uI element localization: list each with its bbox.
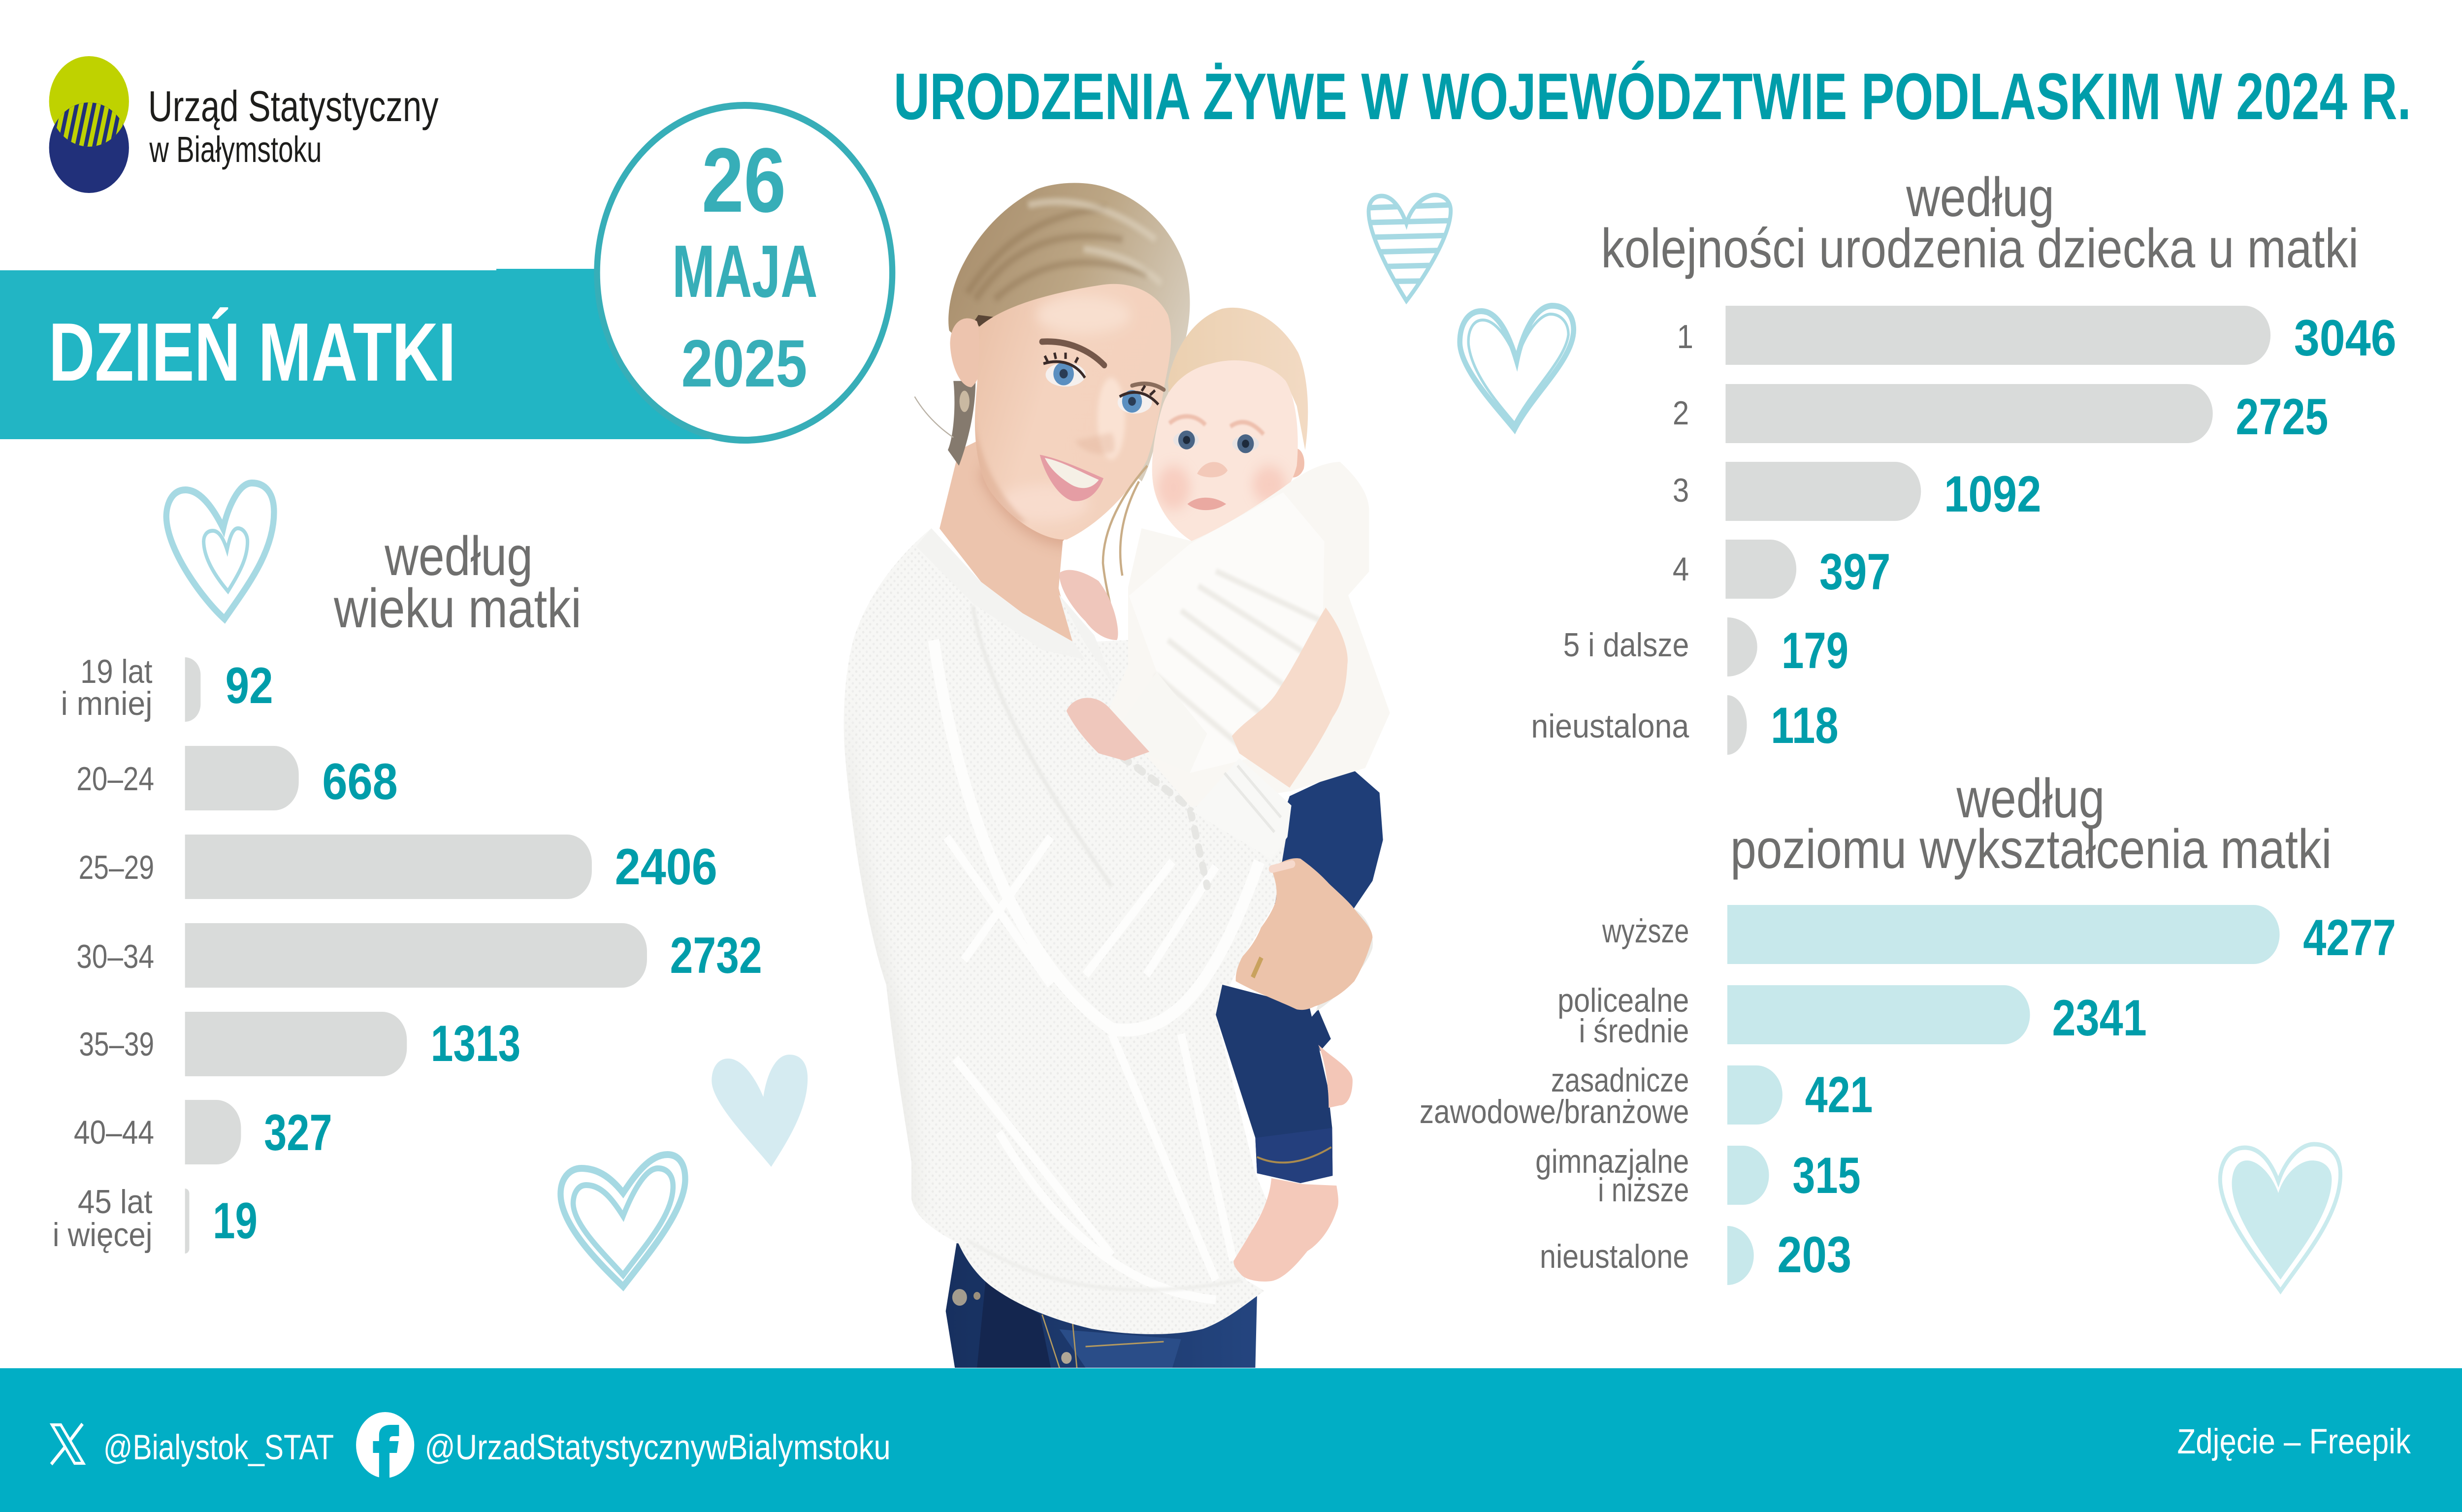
photo: mother holding baby xyxy=(825,183,1390,1368)
heading: education xyxy=(1730,768,2332,880)
lips and smile xyxy=(1040,455,1103,501)
bar chart: education xyxy=(1727,905,2280,1285)
panel: by birth order xyxy=(1531,166,2397,755)
labels: birth order xyxy=(1531,318,1693,745)
woman's jeans xyxy=(946,1243,1257,1368)
labels: education: wyższe xyxy=(1602,912,1689,950)
logo: w Białymstoku xyxy=(149,129,322,170)
ear xyxy=(950,318,984,387)
X handle: @Bialystok_STAT xyxy=(103,1428,334,1467)
labels: education: zawodowe/branżowe xyxy=(1420,1093,1689,1130)
values: birth order: 179 xyxy=(1782,622,1848,679)
woman's lower hand xyxy=(1236,858,1373,1012)
heading: education: poziomu wykształcenia matki xyxy=(1730,818,2332,880)
values: age: 2406 xyxy=(615,838,717,895)
woman's sweater cuff xyxy=(1193,758,1292,859)
values: age: 19 xyxy=(213,1192,258,1249)
eyebrows xyxy=(1042,342,1104,365)
labels: birth order: 1 xyxy=(1677,318,1693,355)
baby's sleeve xyxy=(1109,492,1325,773)
baby's head xyxy=(1103,308,1308,632)
icon: X xyxy=(51,1424,83,1464)
baby's feet xyxy=(1233,1045,1353,1282)
values: age: 668 xyxy=(322,753,398,810)
woman's neck xyxy=(939,442,1072,642)
panel: by mother's age xyxy=(53,525,762,1254)
date circle xyxy=(597,105,892,440)
labels: age: 20–24 xyxy=(76,760,154,798)
heading: birth order xyxy=(1601,166,2359,279)
values: education: 2341 xyxy=(2052,989,2147,1046)
baby's eyes xyxy=(1173,432,1199,448)
woman's upper hand xyxy=(1232,608,1348,788)
sweater collar xyxy=(916,528,1086,660)
values: age: 92 xyxy=(226,657,273,714)
values: age: 327 xyxy=(264,1104,332,1161)
bar chart: birth order xyxy=(1725,306,2270,755)
loose hair strand xyxy=(1103,466,1147,632)
labels: education: gimnazjalne xyxy=(1535,1142,1689,1180)
icon: double outlined heart, top left xyxy=(166,483,274,619)
footer xyxy=(0,1368,2462,1512)
labels: age: 19 lat xyxy=(80,652,153,690)
labels: birth order: 4 xyxy=(1673,550,1689,588)
values: birth order: 1092 xyxy=(1944,465,2041,522)
photo credit: Zdjęcie – Freepik xyxy=(2177,1422,2411,1461)
baby's trousers, upper part xyxy=(1259,768,1383,935)
face skin xyxy=(975,284,1171,540)
icon: big light heart xyxy=(2220,1144,2340,1291)
baby's nose xyxy=(1197,462,1228,477)
baby's fists xyxy=(1059,570,1149,761)
values: birth order: 118 xyxy=(1771,697,1839,754)
values: birth order: 2725 xyxy=(2236,388,2328,445)
heading: age: wieku matki xyxy=(333,578,582,639)
labels: age: 40–44 xyxy=(74,1113,154,1151)
values: education: 421 xyxy=(1805,1066,1873,1123)
baby's jacket xyxy=(1107,462,1390,807)
icon: filled heart xyxy=(712,1055,808,1167)
icon: striped heart xyxy=(1368,195,1453,301)
values: education: 315 xyxy=(1792,1147,1861,1204)
earring xyxy=(960,390,970,412)
labels: education: policealne xyxy=(1557,981,1689,1019)
values: age xyxy=(213,657,762,1249)
heading: birth order: według xyxy=(1906,166,2054,228)
date circle: 26 xyxy=(702,129,786,231)
values: education xyxy=(1777,909,2396,1283)
labels: age: 35–39 xyxy=(79,1025,154,1063)
icon: outline heart xyxy=(1460,306,1574,429)
values: education: 203 xyxy=(1777,1226,1851,1283)
logo xyxy=(41,56,439,193)
labels: age: i mniej xyxy=(61,684,153,722)
heading: education: według xyxy=(1956,768,2105,829)
labels: birth order: nieustalona xyxy=(1531,707,1689,745)
labels: education: nieustalone xyxy=(1540,1237,1689,1275)
woman's head and face xyxy=(914,183,1190,540)
labels: education: i średnie xyxy=(1579,1012,1689,1050)
date circle: MAJA xyxy=(672,230,817,313)
icon: double outline heart, bottom xyxy=(560,1155,685,1287)
values: birth order: 3046 xyxy=(2294,309,2397,366)
icon: Facebook xyxy=(356,1412,414,1479)
baby's mouth xyxy=(1187,498,1226,510)
labels: age: 25–29 xyxy=(79,848,154,886)
values: age: 1313 xyxy=(431,1015,520,1072)
logo: Urząd Statystyczny xyxy=(148,82,439,130)
labels: birth order: 2 xyxy=(1673,394,1689,432)
labels: age: i więcej xyxy=(53,1216,153,1254)
baby's lower leg and trousers xyxy=(1216,985,1332,1183)
labels: age xyxy=(53,652,154,1254)
labels: age: 45 lat xyxy=(78,1183,153,1221)
values: education: 4277 xyxy=(2303,909,2396,966)
labels: education xyxy=(1420,912,1689,1275)
panel: by education level xyxy=(1420,768,2396,1285)
bar chart: age xyxy=(185,657,647,1254)
date circle: 2025 xyxy=(681,326,807,401)
header banner: Dzień Matki xyxy=(0,269,747,439)
labels: birth order: 5 i dalsze xyxy=(1563,626,1689,664)
heading: birth order: kolejności urodzenia dziecka u matki xyxy=(1601,218,2359,279)
labels: age: 30–34 xyxy=(76,937,154,975)
labels: education: zasadnicze xyxy=(1551,1061,1689,1099)
hair xyxy=(948,183,1190,482)
eyes xyxy=(1046,363,1085,386)
woman's sweater xyxy=(825,517,1303,1354)
labels: education: i niższe xyxy=(1598,1171,1689,1209)
heading: age xyxy=(333,525,582,639)
values: birth order: 397 xyxy=(1819,543,1891,600)
values: birth order xyxy=(1771,309,2397,754)
header banner: Dzień Matki: DZIEŃ MATKI xyxy=(49,306,456,398)
heading: age: według xyxy=(384,525,533,587)
labels: birth order: 3 xyxy=(1673,471,1689,509)
values: age: 2732 xyxy=(670,927,762,984)
Facebook handle: @UrzadStatystycznywBialymstoku xyxy=(424,1428,891,1467)
